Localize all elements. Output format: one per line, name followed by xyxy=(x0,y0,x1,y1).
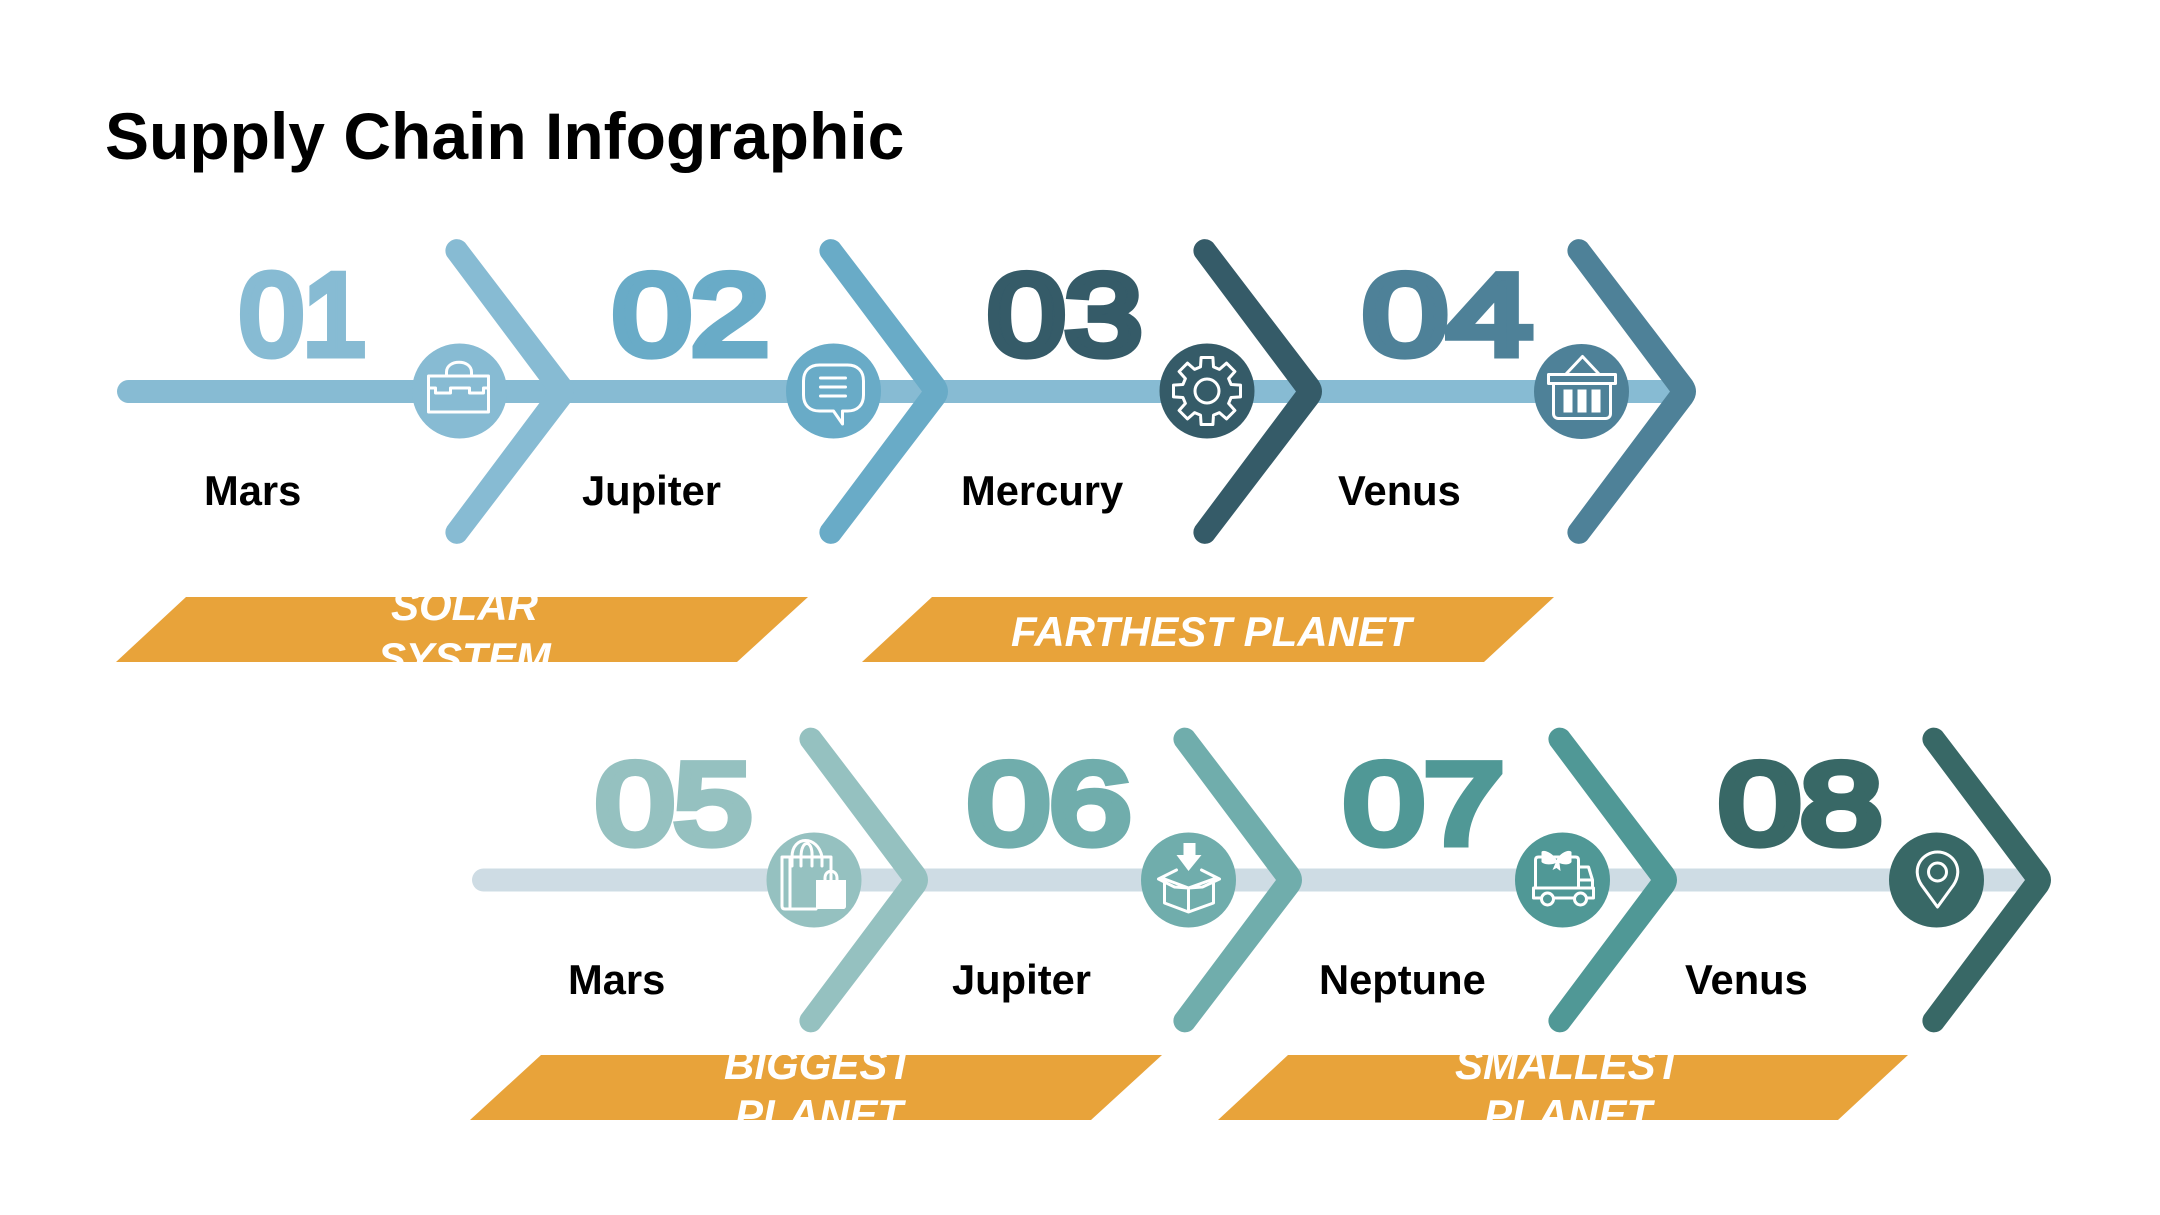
label: Venus: Venus xyxy=(1685,956,1808,1003)
step 03 xyxy=(961,239,1322,544)
title: Supply Chain Infographic xyxy=(105,99,904,173)
icon: location pin xyxy=(1889,832,1984,928)
chevron 04 xyxy=(1567,239,1696,544)
icon: box with arrow xyxy=(1141,832,1236,928)
banner: biggest planet xyxy=(470,1041,1162,1138)
number 04: 04 xyxy=(1363,252,1532,379)
number 02: 02 xyxy=(613,252,769,379)
icon: basket xyxy=(1534,344,1629,439)
timeline bar: row 2 xyxy=(472,868,2032,892)
banner: farthest planet xyxy=(862,597,1554,662)
number 08: 08 xyxy=(1719,741,1882,868)
banner: smallest planet: SMALLEST xyxy=(1455,1041,1685,1088)
label: Venus: Venus xyxy=(1338,467,1461,514)
banner: farthest planet: FARTHEST PLANET xyxy=(1011,608,1415,655)
chevron 08 xyxy=(1922,728,2051,1032)
step 04 xyxy=(1338,239,1696,544)
chevron 03 xyxy=(1193,239,1322,544)
banner: smallest planet xyxy=(1218,1041,1908,1138)
label: Neptune: Neptune xyxy=(1319,956,1486,1003)
chevron 05 xyxy=(799,728,928,1032)
icon: delivery truck xyxy=(1515,832,1610,928)
chevron 01 xyxy=(445,239,574,544)
banner: solar system: SYSTEM xyxy=(378,634,552,681)
icon: gear xyxy=(1160,344,1254,438)
step 07 xyxy=(1319,728,1677,1032)
number 06: 06 xyxy=(968,741,1131,868)
step 01 xyxy=(204,239,574,544)
icon: speech bubble xyxy=(786,344,881,438)
banner: solar system xyxy=(116,582,808,681)
banner: solar system: SOLAR xyxy=(391,582,539,629)
timeline bar: row 1 xyxy=(117,380,1680,403)
number 05: 05 xyxy=(596,741,752,868)
icon: shopping bags xyxy=(766,832,862,928)
label: Jupiter: Jupiter xyxy=(952,956,1091,1003)
label: Mercury: Mercury xyxy=(961,467,1123,514)
number 03: 03 xyxy=(988,252,1142,379)
banner: biggest planet: BIGGEST xyxy=(724,1041,916,1088)
icon: briefcase xyxy=(412,344,507,438)
banner: smallest planet: PLANET xyxy=(1484,1091,1655,1138)
chevron 07 xyxy=(1548,728,1677,1032)
step 05 xyxy=(568,728,928,1032)
banner: biggest planet: PLANET xyxy=(735,1091,906,1138)
chevron 02 xyxy=(819,239,948,544)
step 08 xyxy=(1685,728,2051,1032)
label: Mars: Mars xyxy=(568,956,665,1003)
step 06 xyxy=(952,728,1302,1032)
chevron 06 xyxy=(1173,728,1302,1032)
label: Jupiter: Jupiter xyxy=(582,467,721,514)
label: Mars: Mars xyxy=(204,467,301,514)
number 07: 07 xyxy=(1344,741,1504,868)
number 01: 01 xyxy=(240,252,366,379)
step 02 xyxy=(582,239,948,544)
